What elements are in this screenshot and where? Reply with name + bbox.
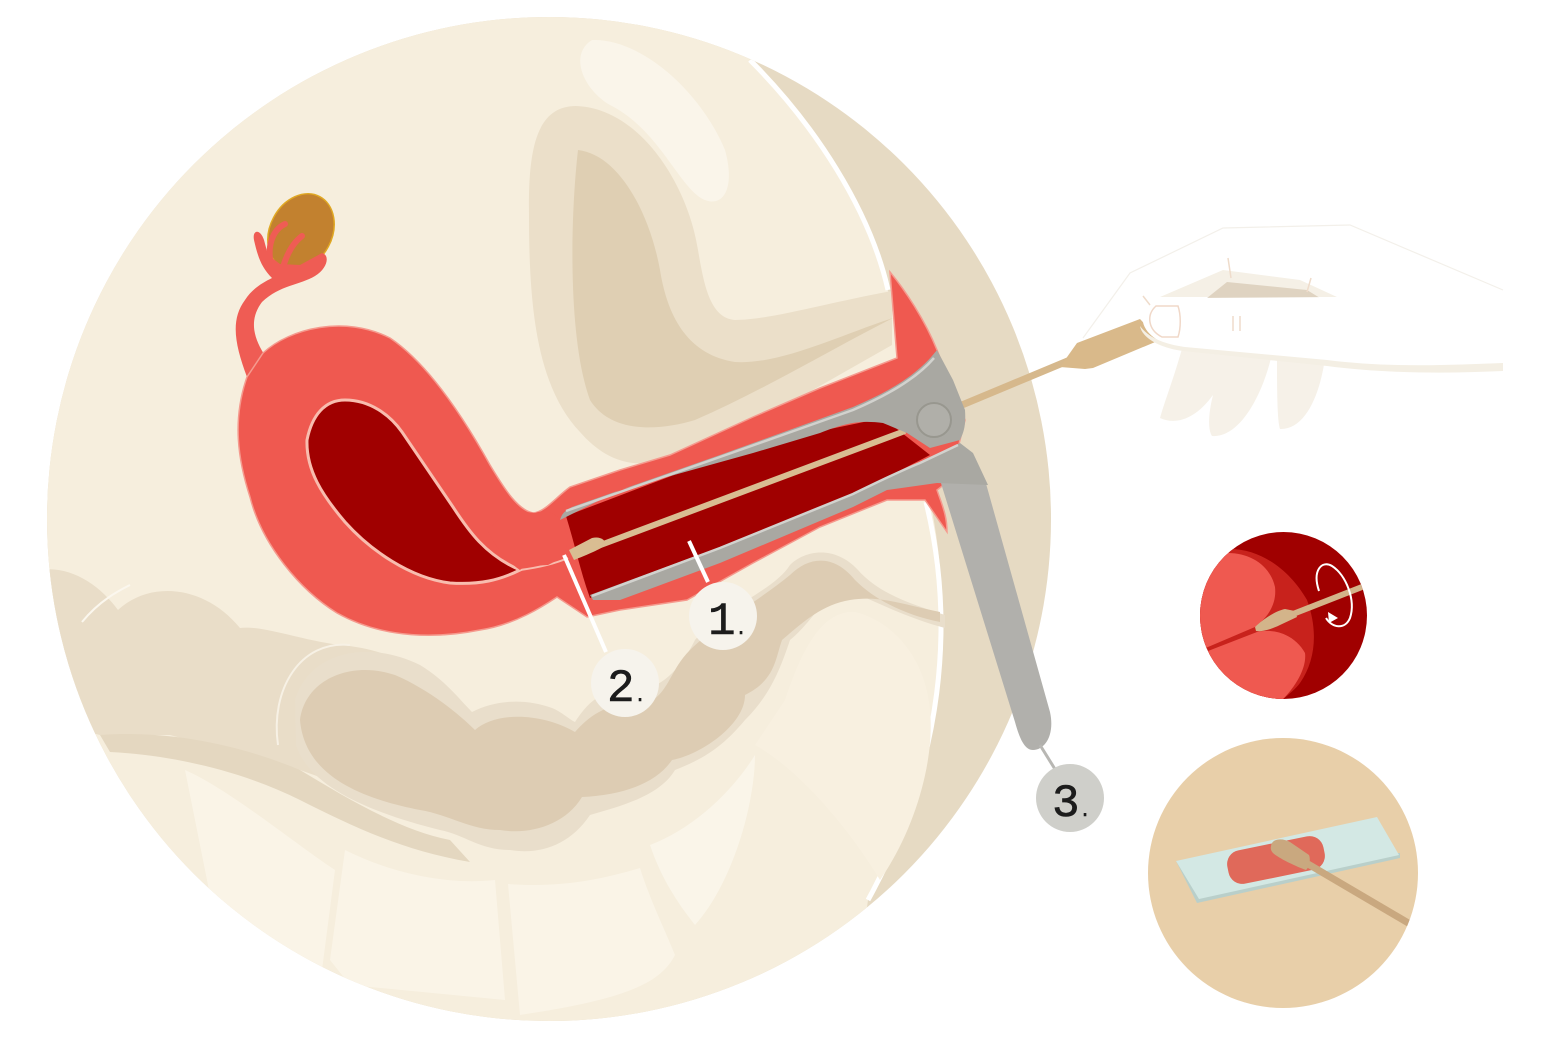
tube xyxy=(236,232,327,377)
rotation arrow xyxy=(1317,564,1352,626)
leader 3 xyxy=(1040,745,1058,774)
cervical canal xyxy=(520,558,568,570)
icon: gloved hand xyxy=(1060,225,1503,436)
lower panel 3 xyxy=(508,868,675,1015)
nail xyxy=(1150,306,1180,337)
lower highlight xyxy=(592,445,958,596)
lower fingers xyxy=(1160,345,1325,436)
uterus and vaginal wall xyxy=(238,272,965,635)
fimbriae xyxy=(270,224,302,268)
handle xyxy=(940,480,1051,750)
white peritoneum arc lower xyxy=(868,502,941,900)
knuckle creases xyxy=(1143,258,1311,331)
fallopian tube and fimbriae xyxy=(236,182,347,377)
finger gap band xyxy=(1160,270,1337,297)
lower panel 4 xyxy=(650,755,755,925)
outer tissue background xyxy=(40,10,1060,1030)
shaft outside xyxy=(962,355,1082,405)
thumb and index finger xyxy=(1143,297,1325,360)
bowel outer xyxy=(295,552,945,851)
lower lip xyxy=(1208,630,1306,699)
thin curve left xyxy=(82,585,130,622)
callout 3 xyxy=(1036,745,1104,832)
white peritoneum arc upper xyxy=(750,60,888,290)
bladder highlight xyxy=(580,40,729,202)
leader 1 xyxy=(689,541,708,582)
upper highlight xyxy=(566,358,934,511)
number 1: 1. xyxy=(708,596,746,648)
bladder inner xyxy=(572,150,893,427)
panel: cervix close-up xyxy=(1200,532,1367,699)
finger lower edge xyxy=(1140,326,1503,373)
inner tissue area xyxy=(40,10,942,1030)
pivot xyxy=(917,403,951,437)
upper blade xyxy=(560,350,965,520)
panel: slide smear xyxy=(1145,735,1421,1011)
vaginal lumen xyxy=(566,418,930,598)
cotton swab xyxy=(569,355,1082,560)
speculum xyxy=(560,350,1051,750)
shaft inside xyxy=(598,431,905,546)
badge 1 xyxy=(689,582,757,650)
cervix mid layer xyxy=(1190,549,1314,702)
number 2: 2. xyxy=(607,663,645,715)
leader 2 xyxy=(564,555,606,652)
bladder outer band xyxy=(529,106,892,463)
lower blade xyxy=(590,443,988,600)
uterine cavity xyxy=(307,400,520,583)
upper lip xyxy=(1200,553,1276,648)
swab tip xyxy=(1255,609,1297,631)
hand outline xyxy=(1083,225,1503,338)
lower panel 1 xyxy=(185,770,335,970)
pelvic highlight xyxy=(878,718,931,880)
callout 1 xyxy=(689,541,757,650)
ovary xyxy=(255,182,347,282)
lower panel 2 xyxy=(330,850,505,1000)
number 3: 3. xyxy=(1052,778,1090,830)
swab shaft xyxy=(1293,587,1362,614)
slide edge xyxy=(1176,853,1400,903)
red tissue xyxy=(238,272,965,635)
smear xyxy=(1225,834,1327,886)
gap shadow xyxy=(1207,282,1320,298)
left bowel loop xyxy=(50,569,379,776)
badge 2 xyxy=(591,649,659,717)
bottom crease band xyxy=(100,734,470,862)
tan background xyxy=(1145,735,1421,1011)
panel: main anatomy circle xyxy=(40,10,1060,1030)
thin curve on bowel xyxy=(277,645,350,745)
applicator shaft xyxy=(1308,864,1410,924)
dark background xyxy=(1200,532,1367,699)
bowel inner xyxy=(300,561,940,831)
swab handle xyxy=(1060,319,1160,369)
applicator head xyxy=(1271,839,1310,870)
glass slide xyxy=(1176,817,1399,899)
badge 3 xyxy=(1036,764,1104,832)
arrowhead xyxy=(1328,612,1338,623)
callout 2 xyxy=(564,555,659,717)
cervix bulb xyxy=(487,510,567,570)
tip xyxy=(569,537,606,560)
